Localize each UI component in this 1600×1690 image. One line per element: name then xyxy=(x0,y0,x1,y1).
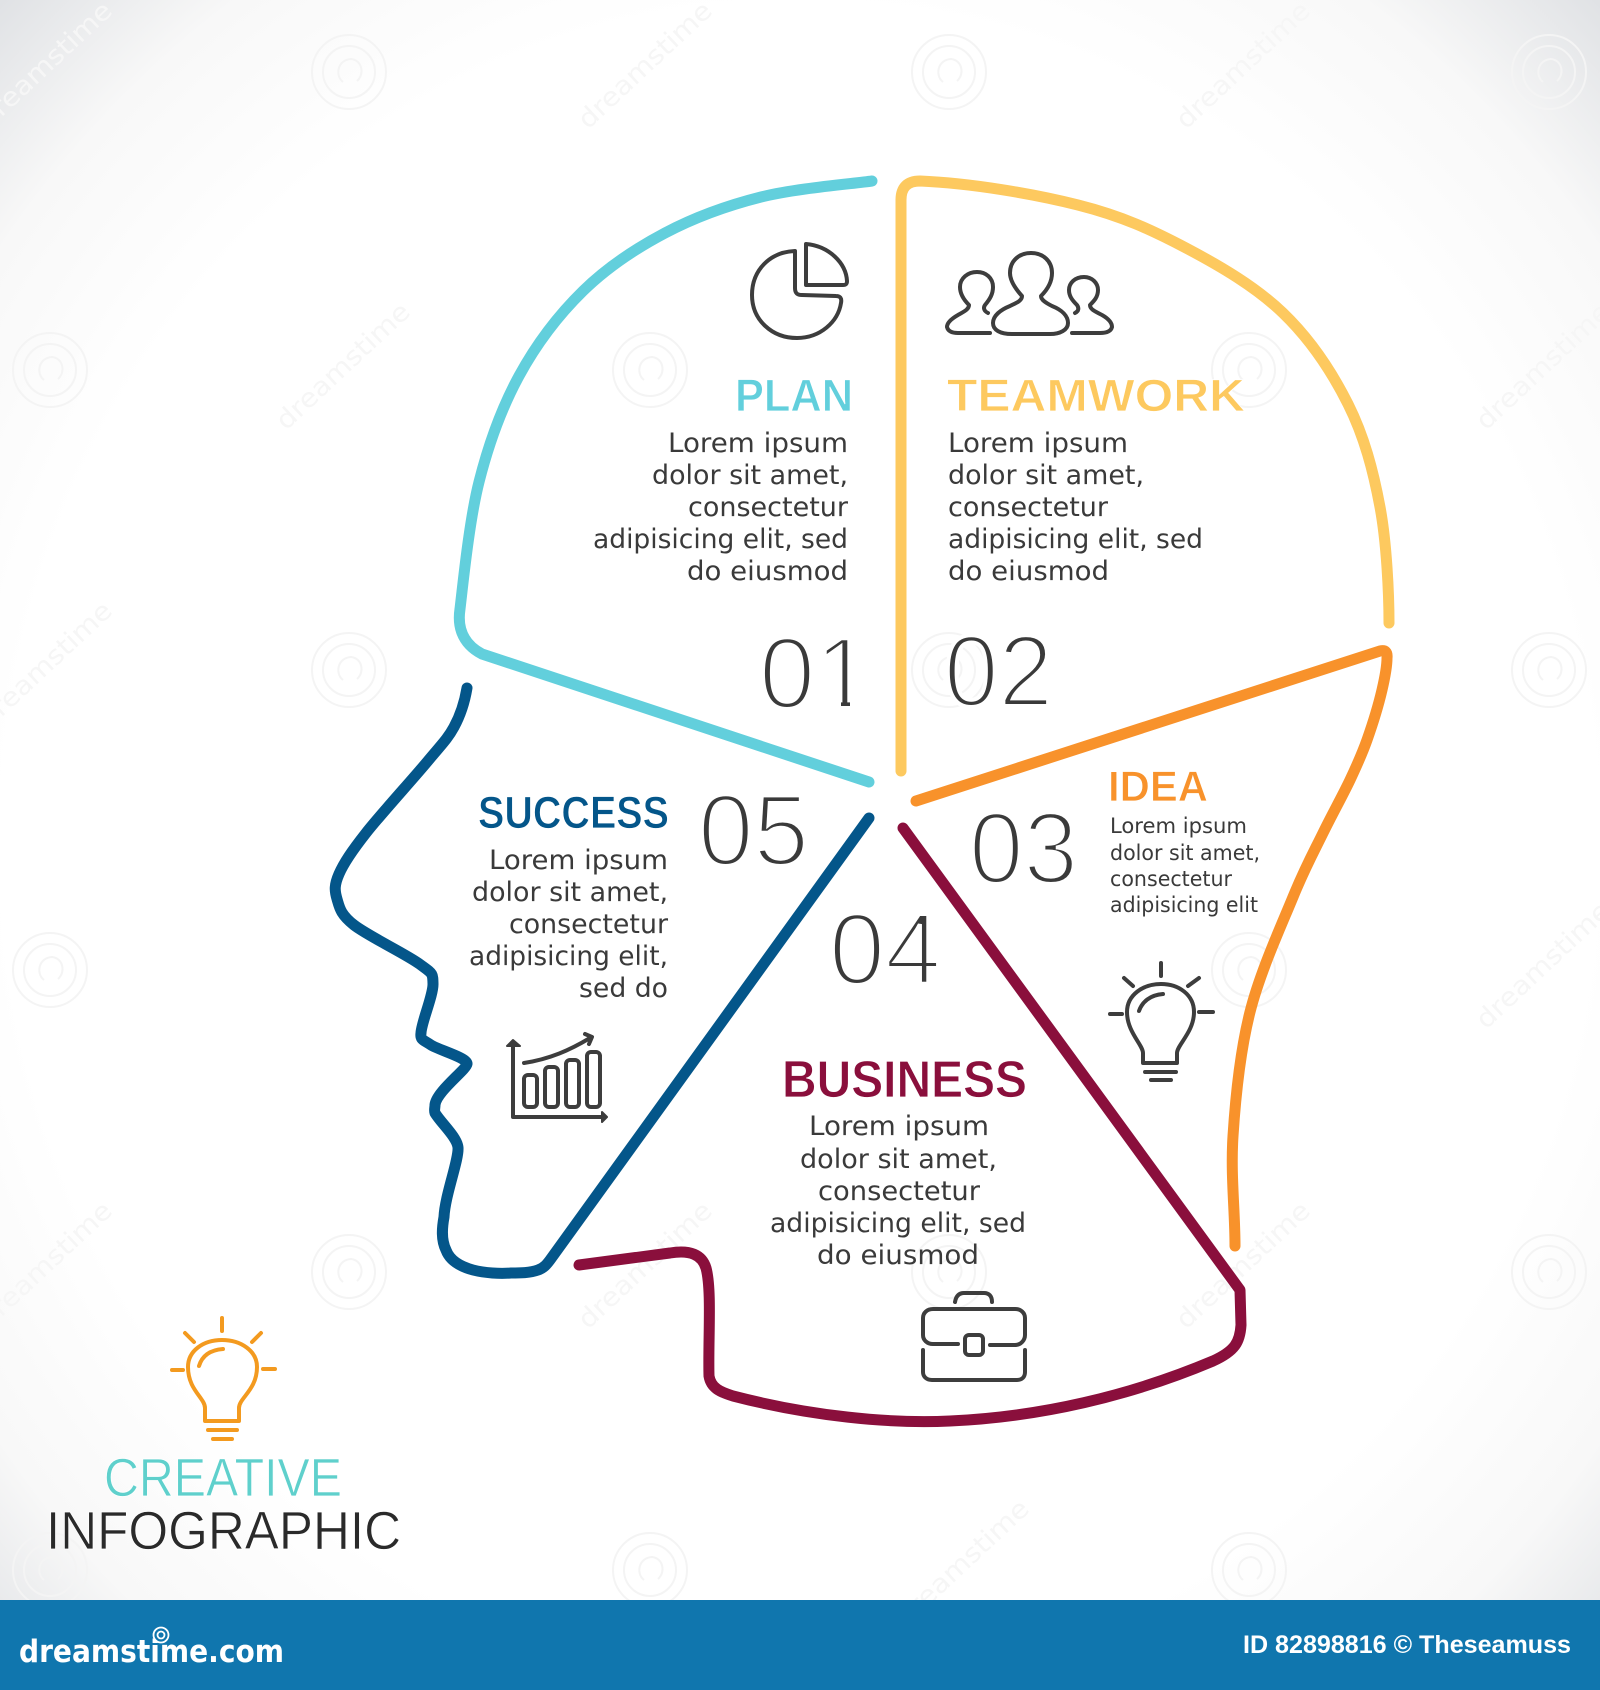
heading: success: SUCCESS xyxy=(478,787,669,838)
icon: pie chart xyxy=(752,244,847,338)
text block: teamwork: adipisicing elit, sed xyxy=(948,524,1203,555)
panel: business xyxy=(579,828,1241,1422)
text block: idea: consectetur xyxy=(1110,867,1232,892)
panel: teamwork xyxy=(901,181,1389,771)
watermark wordmarks: dreamstime xyxy=(1170,1196,1317,1335)
outline: idea xyxy=(916,651,1387,1246)
foot mask for the numeral 1 xyxy=(816,697,872,713)
panel: idea xyxy=(916,651,1387,1246)
outline: teamwork xyxy=(901,181,1389,771)
text block: business xyxy=(770,1111,1026,1271)
text block: success xyxy=(469,845,668,1004)
footer logo text: dreamstime.com xyxy=(19,1634,284,1670)
number: 05: 05 xyxy=(698,775,809,887)
number: 04: 04 xyxy=(829,894,941,1006)
text block: teamwork: dolor sit amet, xyxy=(948,460,1144,491)
heading: idea: IDEA xyxy=(1108,763,1208,811)
panel: success xyxy=(335,688,869,1273)
text block: business: Lorem ipsum xyxy=(809,1111,989,1142)
text block: success: dolor sit amet, xyxy=(472,877,668,908)
text block: business: adipisicing elit, sed xyxy=(770,1208,1026,1239)
text block: business: consectetur xyxy=(818,1176,980,1207)
text block: teamwork xyxy=(948,428,1203,587)
icon: people xyxy=(947,253,1112,334)
text block: plan: adipisicing elit, sed xyxy=(593,524,848,555)
outline: business xyxy=(579,828,1241,1422)
number: 01: 0 xyxy=(759,618,815,730)
text block: teamwork: Lorem ipsum xyxy=(948,428,1128,459)
text block: plan: do eiusmod xyxy=(687,556,848,587)
text block: idea: dolor sit amet, xyxy=(1110,841,1260,866)
icon: light bulb xyxy=(1110,963,1213,1080)
text block: plan: consectetur xyxy=(688,492,848,523)
outline: plan xyxy=(459,181,872,782)
title: infographic: INFOGRAPHIC xyxy=(46,1501,401,1561)
number: 02: 02 xyxy=(944,616,1053,728)
text block: business: do eiusmod xyxy=(817,1240,979,1271)
footer band xyxy=(0,1600,1600,1690)
text block: plan: dolor sit amet, xyxy=(652,460,848,491)
watermark wordmarks: dreamstime xyxy=(572,0,719,135)
text block: plan: Lorem ipsum xyxy=(668,428,848,459)
panel: plan xyxy=(459,181,872,782)
watermark wordmarks: dreamstime xyxy=(889,1494,1036,1633)
footer credit: ID 82898816 © Theseamuss xyxy=(1243,1631,1571,1659)
heading: teamwork: TEAMWORK xyxy=(947,370,1246,421)
watermark wordmarks: dreamstime xyxy=(1170,0,1317,135)
text block: success: adipisicing elit, xyxy=(469,941,668,972)
text block: success: Lorem ipsum xyxy=(489,845,668,876)
title: creative: CREATIVE xyxy=(104,1448,342,1508)
number: 03: 03 xyxy=(969,793,1078,905)
text block: idea: adipisicing elit xyxy=(1110,893,1258,918)
number: 01: 1 xyxy=(815,618,871,730)
icon: orange light bulb xyxy=(172,1318,275,1439)
text block: idea xyxy=(1110,814,1260,918)
text block: plan xyxy=(593,428,848,587)
text block: business: dolor sit amet, xyxy=(800,1144,997,1175)
heading: plan: PLAN xyxy=(735,370,853,421)
icon: bar chart xyxy=(507,1034,607,1122)
text block: teamwork: do eiusmod xyxy=(948,556,1109,587)
heading: business: BUSINESS xyxy=(782,1051,1027,1109)
text block: success: sed do xyxy=(579,973,668,1004)
watermark wordmarks: dreamstime xyxy=(572,1196,719,1335)
text block: teamwork: consectetur xyxy=(948,492,1108,523)
text block: idea: Lorem ipsum xyxy=(1110,814,1247,839)
footer logo spiral xyxy=(154,1628,168,1642)
watermark wordmarks: dreamstime xyxy=(270,297,417,436)
icon: briefcase xyxy=(923,1293,1025,1380)
text block: success: consectetur xyxy=(509,909,668,940)
outline: success xyxy=(335,688,869,1273)
